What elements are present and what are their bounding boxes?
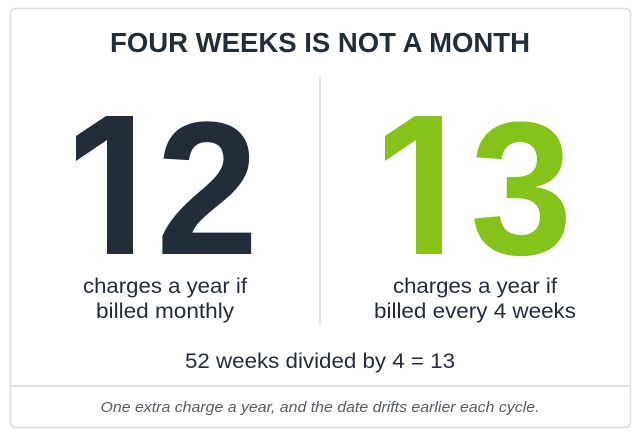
monthly caption line 2: billed monthly [96, 299, 234, 323]
big number 13: 3 [470, 82, 572, 295]
monthly caption: charges a year if [83, 274, 247, 298]
four-week caption: charges a year if [393, 274, 557, 298]
footer separator [11, 385, 630, 387]
calculation line: 52 weeks divided by 4 = 13 [185, 349, 455, 373]
vertical divider [319, 77, 321, 325]
big number 13 [385, 116, 566, 256]
footer note: One extra charge a year, and the date drifts earlier each cycle. [100, 399, 540, 416]
big number 12 [76, 116, 252, 254]
left column: monthly billing [76, 116, 252, 322]
big number 13: 1 [281, 72, 524, 297]
title: FOUR WEEKS IS NOT A MONTH [110, 27, 530, 58]
four-week caption line 2: billed every 4 weeks [374, 299, 576, 323]
big number 12: 2 [156, 82, 258, 295]
right column: four-week billing [375, 116, 576, 322]
